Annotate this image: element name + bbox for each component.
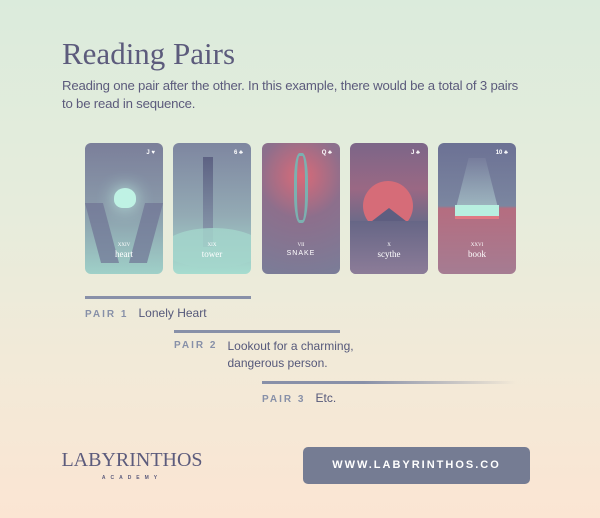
card: tower: 6 ♣ xyxy=(234,150,243,156)
card: scythe: X xyxy=(387,243,391,248)
logo xyxy=(61,449,203,481)
card: book: XXVI xyxy=(471,243,483,248)
card: book: 10 ♣ xyxy=(496,150,508,156)
button: website: WWW.LABYRINTHOS.CO xyxy=(332,459,501,471)
card: tower: XIX xyxy=(208,243,216,248)
pair 2 xyxy=(174,330,354,370)
card: scythe xyxy=(350,143,428,274)
pair 2: PAIR 2 xyxy=(174,340,218,351)
card: heart: J ♥ xyxy=(146,150,155,156)
title: Reading Pairs xyxy=(62,36,235,71)
card: scythe: J ♣ xyxy=(411,150,420,156)
logo: ACADEMY xyxy=(102,475,162,481)
logo: LABYRINTHOS xyxy=(61,449,203,471)
card: scythe: scythe xyxy=(378,249,400,259)
card: snake: SNAKE xyxy=(287,250,315,257)
pair 2: dangerous person. xyxy=(228,356,328,370)
card: snake: Q ♣ xyxy=(322,150,332,156)
pair 1 xyxy=(85,296,251,320)
card: book: book xyxy=(468,249,486,259)
pair 2: Lookout for a charming, xyxy=(228,339,354,353)
card: tower xyxy=(173,143,251,274)
card: heart: heart xyxy=(115,249,133,259)
card: snake xyxy=(262,143,340,274)
button: website xyxy=(303,447,530,484)
card: heart xyxy=(85,143,163,274)
pair 1: PAIR 1 Lonely Heart xyxy=(85,306,207,320)
subtitle: Reading one pair after the other. In this example, there would be a total of 3 pairs to be read in sequence. xyxy=(62,78,518,111)
card: book xyxy=(438,143,516,274)
pair 3 xyxy=(262,381,504,405)
card: heart: XXIV xyxy=(118,243,130,248)
pair 3: PAIR 3 Etc. xyxy=(262,391,336,405)
card: snake: VII xyxy=(298,243,304,248)
card: tower: tower xyxy=(202,249,222,259)
